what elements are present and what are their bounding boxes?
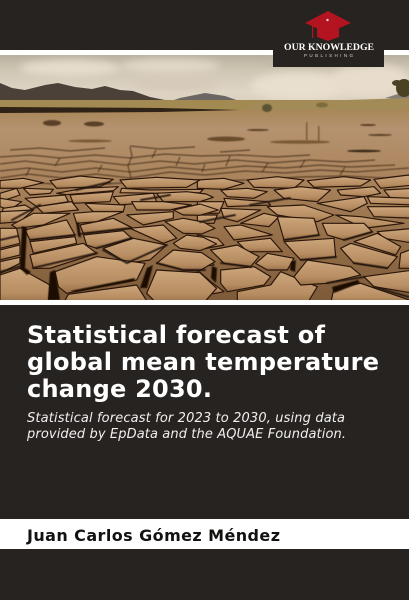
top dark band [0,0,409,50]
mountains [0,83,409,100]
lower dark panel [0,305,409,600]
icon: red graduation cap [305,11,351,41]
title [27,321,379,403]
right cracked mud cells [197,175,409,303]
photo: cracked dry earth landscape [0,55,409,303]
logo: Our Knowledge Publishing [273,0,384,67]
logo subline: PUBLISHING [304,53,353,58]
ground [0,110,409,301]
lower white stripe [0,300,409,305]
grass strip [0,100,345,110]
title: Statistical forecast of [27,321,326,349]
title: change 2030. [27,375,212,403]
subtitle: provided by EpData and the AQUAE Foundation. [26,427,346,442]
sky with clouds [0,55,409,105]
distant small cracks [0,146,409,186]
title: global mean temperature [27,348,379,376]
logo wordmark: OUR KNOWLEDGE [284,43,374,53]
tree at the right edge [392,79,409,97]
deep crack shadows [20,222,360,300]
scrub bushes [43,102,392,152]
left cracked mud cells [0,176,218,303]
subtitle: Statistical forecast for 2023 to 2030, using data [27,411,345,426]
logo background plate [273,0,384,67]
shadowed lower cell edges [0,182,409,297]
top white stripe [0,50,409,55]
subtitle [26,411,346,442]
dark water strip [0,107,240,113]
author name: Juan Carlos Gómez Méndez [26,526,280,545]
author band [0,519,409,549]
